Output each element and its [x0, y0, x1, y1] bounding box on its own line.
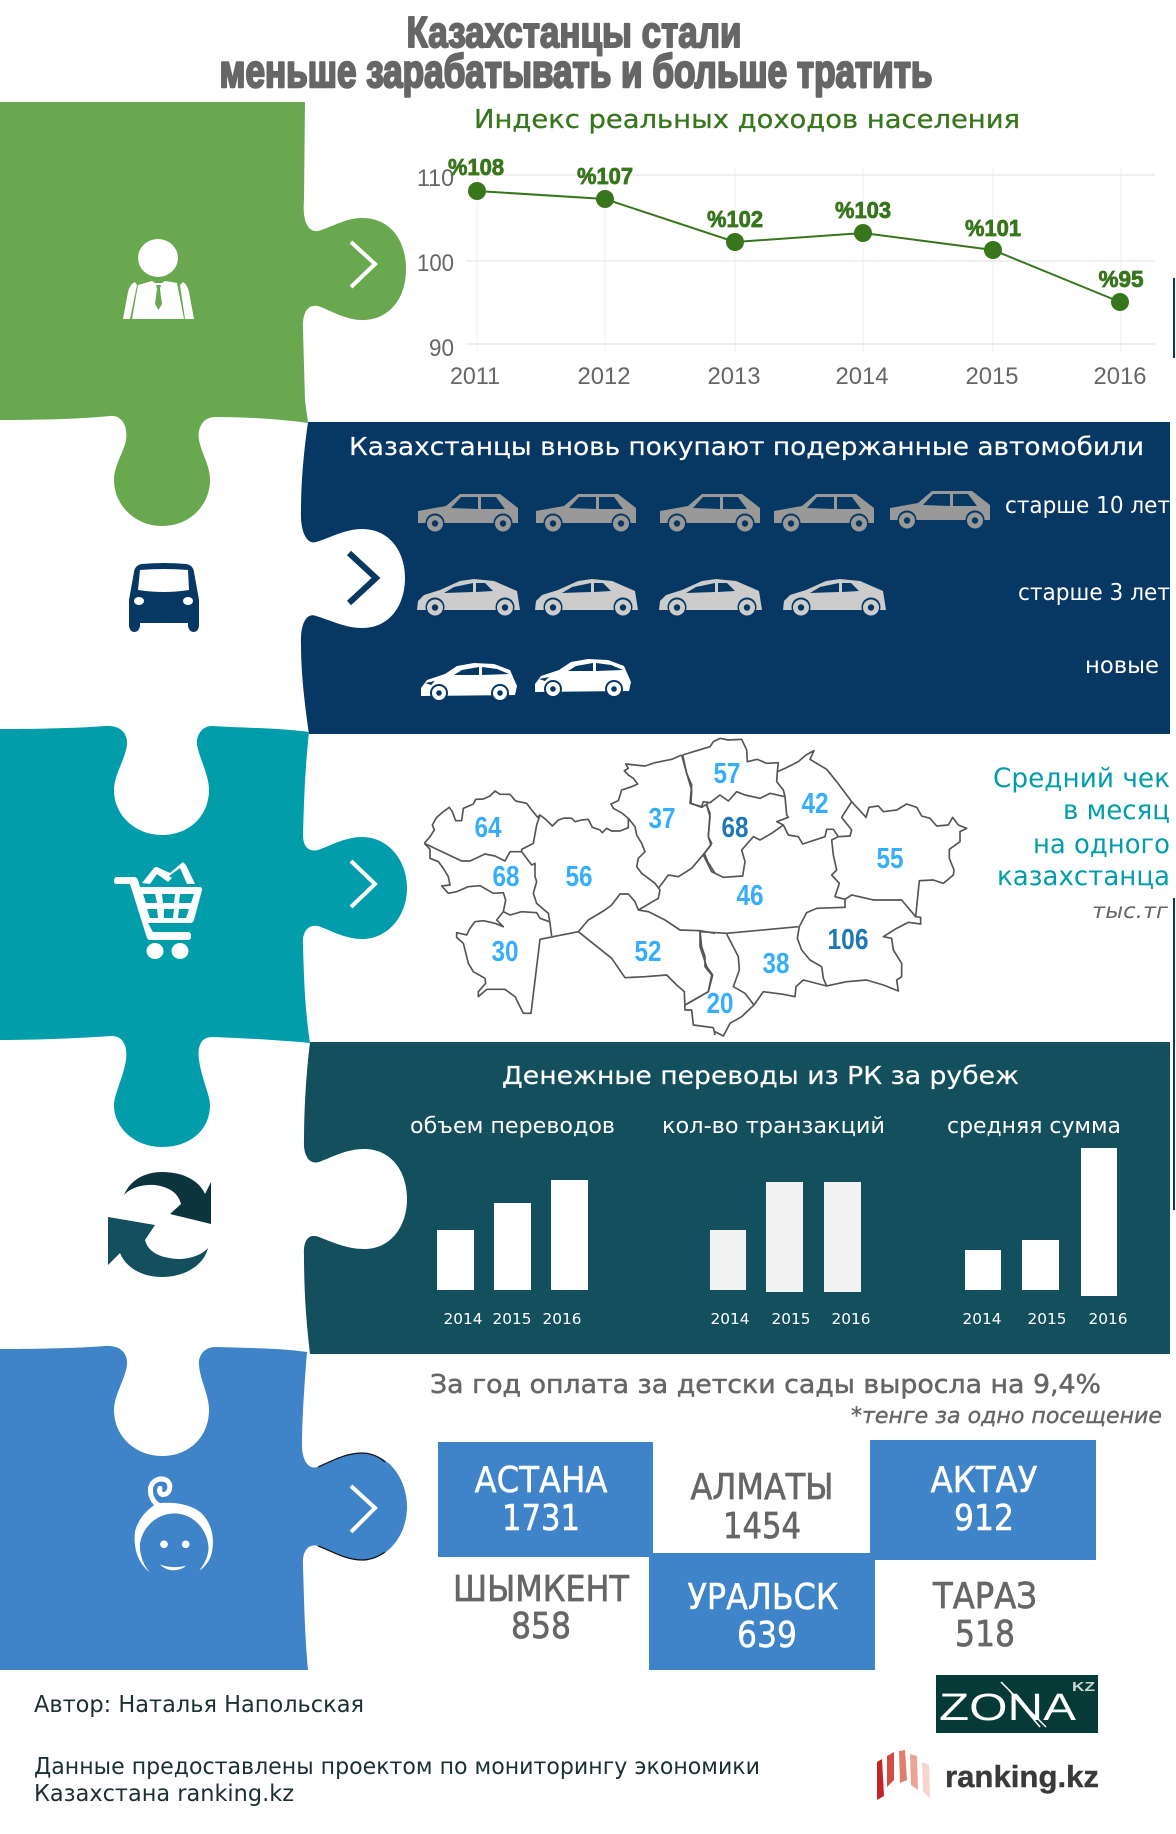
line chart: income index: %103	[835, 197, 891, 223]
text: average bill	[993, 763, 1170, 892]
note: tenge per visit: *тенге за одно посещение	[851, 1404, 1162, 1429]
heading: used cars: Казахстанцы вновь покупают подержанные автомобили	[349, 432, 1144, 461]
line chart: income index: 100	[417, 250, 454, 277]
bar chart: transfer volume	[410, 1114, 615, 1328]
icon: person	[123, 239, 194, 319]
label: new: новые	[1085, 653, 1159, 679]
bar chart: average amount: 2014	[962, 1310, 1002, 1328]
icon: refresh arrows	[108, 1172, 211, 1277]
logo: ZONA.kz: KZ	[1072, 1679, 1095, 1694]
bar chart: transaction count: 2015	[772, 1310, 810, 1328]
map of Kazakhstan: 20	[706, 988, 734, 1020]
line chart: income index: 2011	[450, 363, 500, 390]
bar chart: transaction count	[662, 1114, 885, 1328]
bar chart: transfer volume: 2015	[492, 1310, 532, 1328]
city table: АСТАНА	[474, 1460, 608, 1501]
cars row: older than 10 years	[418, 491, 990, 532]
title: Казахстанцы стали	[406, 8, 742, 57]
line chart: income index: 2015	[966, 363, 1018, 390]
text: average bill: казахстанца	[997, 861, 1170, 892]
map of Kazakhstan: 56	[566, 861, 592, 893]
title: меньше зарабатывать и больше тратить	[220, 45, 932, 97]
city table: 1454	[723, 1506, 801, 1547]
line chart: income index: 90	[429, 335, 454, 362]
bar chart: average amount	[947, 1114, 1128, 1328]
panel: navy used cars background	[301, 422, 1170, 734]
city table: 1731	[502, 1498, 580, 1539]
heading: income index: Индекс реальных доходов населения	[474, 105, 1020, 135]
line chart: income index: 110	[417, 165, 454, 192]
map of Kazakhstan	[424, 738, 967, 1036]
line chart: income index	[417, 154, 1155, 390]
map of Kazakhstan: 55	[876, 843, 904, 875]
bar chart: transfer volume: 2016	[542, 1310, 582, 1328]
bar chart: transaction count: кол-во транзакций	[662, 1114, 885, 1139]
line chart: income index: 2014	[836, 363, 888, 390]
line chart: income index: %107	[577, 163, 633, 189]
city table: 518	[955, 1614, 1015, 1655]
logo: ZONA.kz: ZONA	[939, 1687, 1077, 1729]
label: older than 10 years: старше 10 лет	[1005, 493, 1170, 519]
text: average bill: в месяц	[1063, 795, 1170, 826]
icon: chevron teal	[351, 861, 375, 907]
map of Kazakhstan: 30	[492, 936, 518, 968]
bar chart: average amount: 2016	[1088, 1310, 1128, 1328]
cars row: new	[421, 659, 631, 702]
logo: ZONA.kz	[936, 1675, 1098, 1733]
line chart: income index: 2016	[1094, 363, 1146, 390]
bar chart: transaction count: 2016	[832, 1310, 870, 1328]
city table: ТАРАЗ	[932, 1576, 1037, 1617]
label: older than 3 years: старше 3 лет	[1018, 580, 1170, 606]
line chart: income index: 2012	[578, 363, 630, 390]
bar chart: transfer volume: объем переводов	[410, 1114, 615, 1139]
map of Kazakhstan: 68	[722, 812, 748, 844]
map of Kazakhstan: 52	[634, 936, 662, 968]
map of Kazakhstan: 64	[474, 812, 502, 844]
icon: chevron green piece	[351, 242, 375, 287]
city table: ШЫМКЕНТ	[453, 1569, 630, 1610]
line chart: income index: %95	[1098, 266, 1144, 292]
heading: transfers: Денежные переводы из РК за рубеж	[502, 1061, 1019, 1090]
city table: 858	[511, 1606, 571, 1647]
city table: УРАЛЬСК	[688, 1577, 838, 1618]
puzzle piece: green	[0, 102, 406, 526]
bar chart: average amount: средняя сумма	[947, 1114, 1121, 1139]
city table: АЛМАТЫ	[690, 1467, 834, 1508]
puzzle piece: teal	[0, 726, 407, 1147]
city table: АКТАУ	[930, 1460, 1038, 1501]
title	[220, 8, 932, 97]
map of Kazakhstan: 42	[802, 788, 828, 820]
map of Kazakhstan: 68	[492, 861, 520, 893]
bar chart: transaction count: 2014	[710, 1310, 750, 1328]
cars row: older than 3 years	[417, 579, 886, 616]
map of Kazakhstan: 46	[736, 880, 764, 912]
tab outline	[318, 1453, 385, 1560]
icon: chevron navy	[349, 553, 376, 603]
map of Kazakhstan: 57	[714, 758, 740, 790]
city table: 639	[737, 1615, 797, 1656]
icon: chevron blue piece	[351, 1486, 375, 1532]
city table	[438, 1440, 1096, 1670]
map of Kazakhstan: 38	[762, 948, 790, 980]
right edge lines	[1173, 278, 1175, 1210]
footer: data source: Данные предоставлены проектом по мониторингу экономики	[34, 1754, 760, 1780]
text: thousand tenge: тыс.тг	[1092, 899, 1169, 923]
bar chart: average amount: 2015	[1028, 1310, 1066, 1328]
panel: dark teal transfers background	[304, 1042, 1170, 1354]
footer: author: Автор: Наталья Напольская	[34, 1692, 364, 1718]
map of Kazakhstan: 37	[648, 803, 676, 835]
logo: ranking.kz: ranking.kz	[945, 1759, 1099, 1794]
line chart: income index: 2013	[708, 363, 760, 390]
text: average bill: на одного	[1033, 829, 1170, 860]
icon: shopping cart	[114, 862, 202, 959]
line chart: income index: %101	[965, 215, 1021, 241]
icon: bus	[129, 563, 199, 632]
footer: data source	[34, 1754, 760, 1807]
line chart: income index: %108	[448, 154, 504, 180]
heading: kindergarten fee: За год оплата за детски сады выросла на 9,4%	[430, 1370, 1101, 1400]
text: average bill: Средний чек	[993, 763, 1170, 794]
bar chart: transfer volume: 2014	[444, 1310, 482, 1328]
map of Kazakhstan: 106	[828, 924, 868, 956]
puzzle piece: blue	[0, 1346, 407, 1670]
footer: data source: Казахстана ranking.kz	[34, 1781, 294, 1807]
logo: ranking.kz	[877, 1750, 1099, 1800]
city table: 912	[954, 1498, 1014, 1539]
line chart: income index: %102	[707, 206, 763, 232]
icon: baby face	[135, 1479, 213, 1573]
